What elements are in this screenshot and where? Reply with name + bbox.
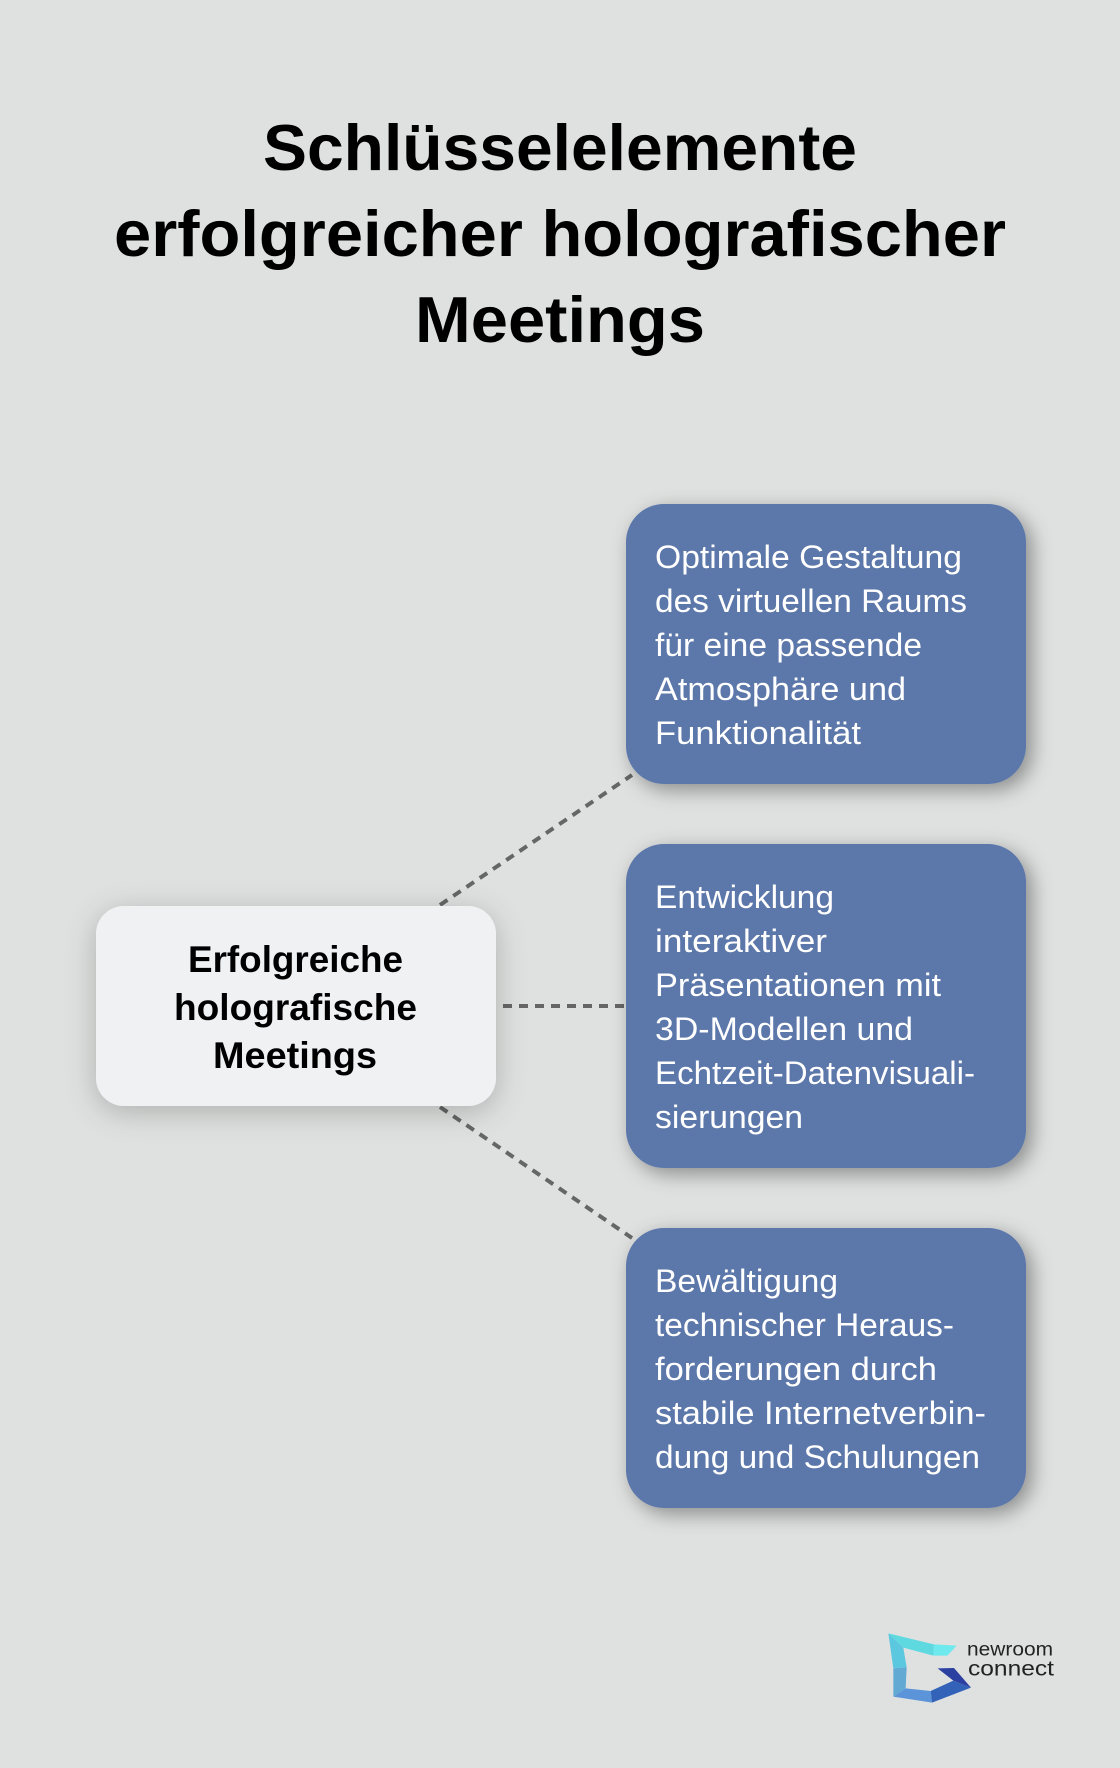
title: Schlüsselelemente [263, 111, 857, 184]
icon: logo mark [888, 1633, 971, 1703]
panel: interactive presentations: Präsentationen mit [655, 967, 941, 1003]
panel: technical challenges: stabile Internetverbin- [655, 1395, 986, 1431]
panel: interactive presentations: Entwicklung [655, 879, 834, 915]
panel: virtual room design: Optimale Gestaltung [655, 539, 962, 575]
panel: virtual room design: Funktionalität [655, 715, 861, 751]
panel: interactive presentations: interaktiver [655, 923, 827, 959]
panel: interactive presentations: 3D-Modellen und [655, 1011, 913, 1047]
title: erfolgreicher holografischer [114, 197, 1006, 270]
panel: virtual room design: Atmosphäre und [655, 671, 906, 707]
connector: center to middle box [503, 1004, 625, 1008]
panel: technical challenges: Bewältigung [655, 1263, 838, 1299]
logo: newroom connect [888, 1633, 1054, 1703]
panel: interactive presentations: sierungen [655, 1099, 803, 1135]
panel: virtual room design: für eine passende [655, 627, 922, 663]
panel: center topic: holografische [174, 987, 417, 1028]
panel: center topic: Erfolgreiche [188, 939, 403, 980]
connector: center to top box [440, 775, 632, 905]
panel: interactive presentations [626, 844, 1026, 1168]
logo: newroom connect: newroom [967, 1640, 1053, 1660]
panel: interactive presentations: Echtzeit-Datenvisuali- [655, 1055, 975, 1091]
panel: center topic [96, 906, 496, 1106]
panel: virtual room design [626, 504, 1026, 784]
connector: center to bottom box [440, 1107, 632, 1238]
logo: newroom connect: connect [968, 1658, 1054, 1680]
panel: center topic: Meetings [213, 1035, 377, 1076]
panel: virtual room design: des virtuellen Raums [655, 583, 967, 619]
panel: technical challenges: dung und Schulungen [655, 1439, 980, 1475]
panel: technical challenges [626, 1228, 1026, 1508]
title: Meetings [415, 283, 705, 356]
panel: technical challenges: technischer Heraus- [655, 1307, 954, 1343]
title [114, 111, 1006, 356]
panel: technical challenges: forderungen durch [655, 1351, 937, 1387]
